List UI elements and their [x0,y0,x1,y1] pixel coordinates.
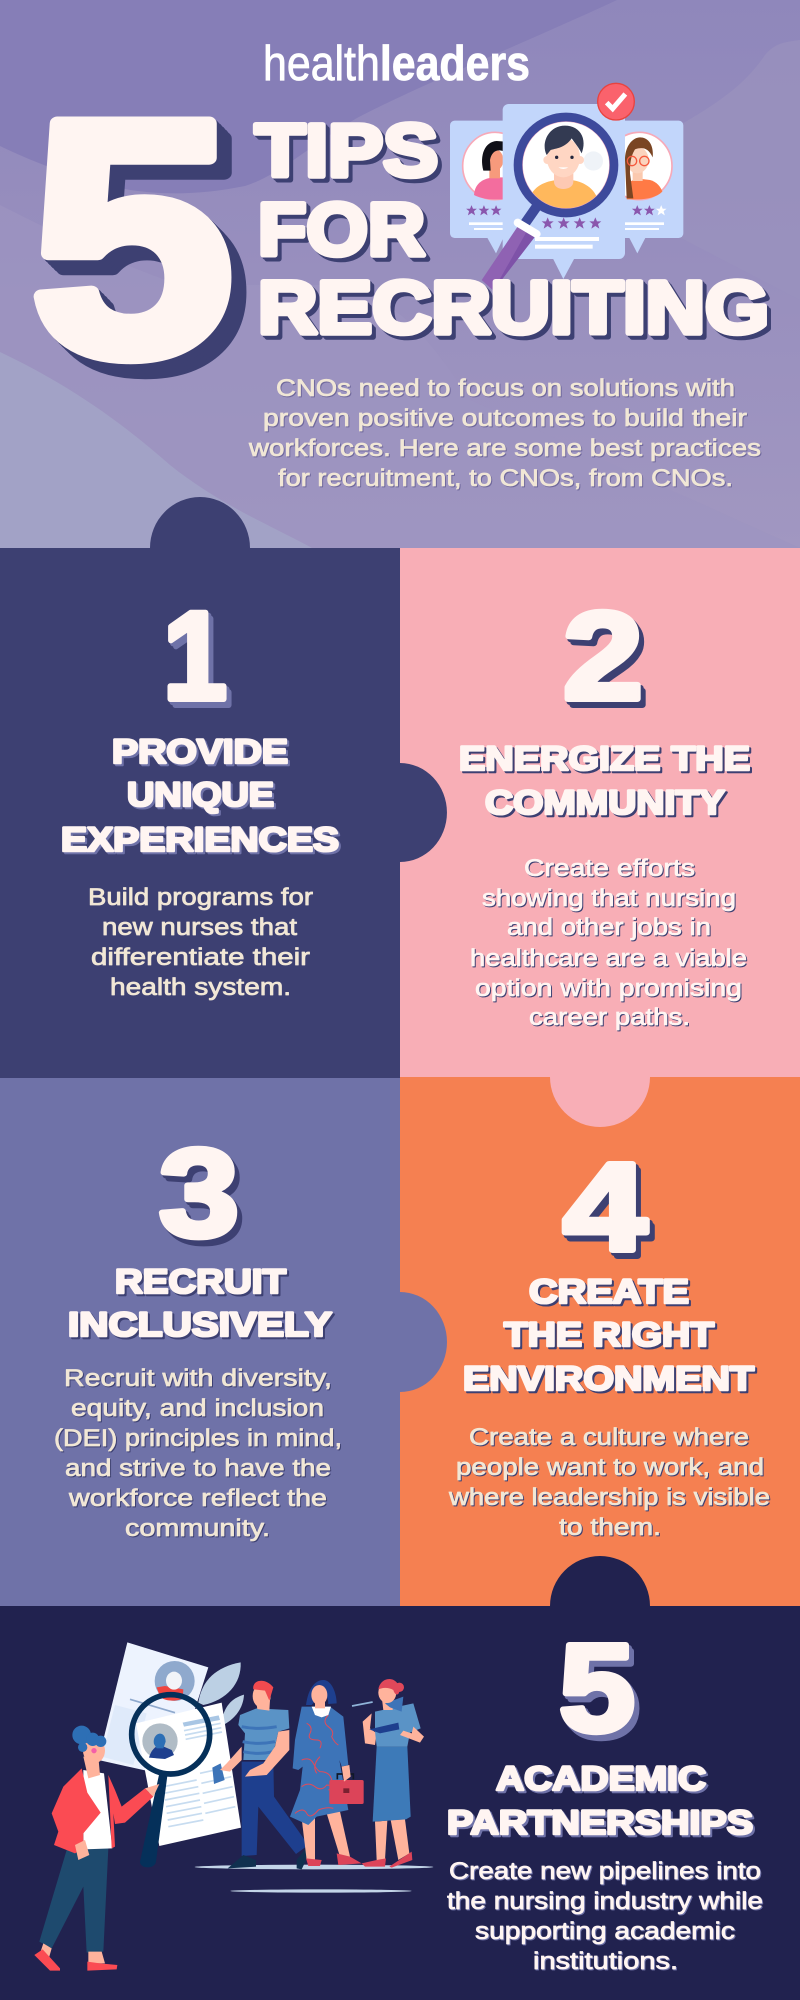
logo: healthleaders: healthleaders [263,37,530,91]
card: left candidate [450,121,527,253]
back resume [98,1642,208,1777]
heading: provide unique experiences: EXPERIENCES [61,821,339,859]
body text: where leadership is visible [448,1484,770,1511]
title: 5 tips for recruiting [255,109,769,349]
body text: Create new pipelines into [449,1858,761,1885]
body text: option with promising [475,975,742,1002]
body text [470,855,747,1031]
heading: academic partnerships: PARTNERSHIPS [447,1804,753,1842]
heading: create the right environment [463,1273,754,1398]
icon: magnifier with central portrait [482,117,614,291]
title: 5 tips for recruiting: FOR [258,188,425,271]
intro paragraph: workforces. Here are some best practices [248,435,761,462]
panel: tip 5 background [0,1556,800,2000]
floor shadows [195,1865,433,1893]
illustration: candidate profile cards under magnifier [450,83,683,291]
body text: healthcare are a viable [470,945,747,972]
tip 1 [61,587,339,1001]
body text: Recruit with diversity, [64,1365,332,1392]
heading: energize the community [459,740,750,822]
body text: equity, and inclusion [71,1395,324,1422]
body text: Create a culture where [469,1424,749,1451]
number 4: 4 [563,1138,647,1277]
intro paragraph: CNOs need to focus on solutions with [276,375,735,402]
body text [88,884,313,1001]
panel: tip 3 background [0,1078,447,1606]
front resume [136,1703,241,1846]
person: woman with red bag [290,1680,364,1866]
body text [54,1365,342,1542]
card: center candidate [503,104,625,279]
body text: (DEI) principles in mind, [54,1425,342,1452]
person: recruiter in red jacket [34,1726,159,1971]
body text: differentiate their [91,944,310,971]
body text: workforce reflect the [68,1485,327,1512]
tip 4 [448,1138,770,1541]
body text: showing that nursing [482,885,736,912]
body text: institutions. [533,1948,678,1975]
card: right candidate [607,121,683,253]
panel: header background [0,0,800,548]
tab: pink puzzle knob [550,1077,650,1127]
body text: supporting academic [475,1918,735,1945]
illustration: recruiters reviewing resumes [34,1642,433,1971]
body text: community. [125,1515,270,1542]
body text [448,1424,770,1541]
title: 5 tips for recruiting: TIPS [255,109,438,192]
panel: tip 4 background [400,1077,800,1606]
heading: create the right environment: ENVIRONMENT [463,1360,754,1398]
panel: tip 2 background [400,548,800,1078]
intro paragraph [248,375,761,492]
leaves [198,1662,244,1724]
heading: academic partnerships [447,1760,753,1842]
number 5: 5 [559,1619,635,1758]
tip 3 [54,1124,342,1542]
person: man walking [220,1681,313,1869]
title: 5 tips for recruiting: RECRUITING [258,266,769,349]
big number 5: 5 [30,51,234,425]
heading: energize the community: ENERGIZE THE [459,740,750,778]
body text: career paths. [529,1004,690,1031]
heading: create the right environment: THE RIGHT [504,1316,714,1354]
heading: provide unique experiences: PROVIDE [112,733,288,771]
person: woman with notebook [352,1679,424,1868]
body text: and strive to have the [65,1455,331,1482]
heading: academic partnerships: ACADEMIC [496,1760,706,1798]
heading: create the right environment: CREATE [529,1273,689,1311]
body text: to them. [559,1514,661,1541]
intro paragraph: proven positive outcomes to build their [263,405,747,432]
body text [447,1858,763,1975]
heading: provide unique experiences [61,733,339,859]
tip 2 [459,587,750,1031]
icon: check badge [598,83,634,120]
heading: provide unique experiences: UNIQUE [127,776,274,814]
body text: people want to work, and [456,1454,764,1481]
body text: Build programs for [88,884,313,911]
heading: recruit inclusively: RECRUIT [115,1263,286,1301]
magnifier held by recruiter [132,1695,210,1867]
body text: and other jobs in [507,914,711,941]
body text: health system. [110,974,291,1001]
heading: energize the community: COMMUNITY [485,784,725,822]
number 1: 1 [163,587,227,726]
panel: tip 1 background [0,497,447,1078]
heading: recruit inclusively [68,1263,332,1344]
number 3: 3 [159,1124,239,1263]
heading: recruit inclusively: INCLUSIVELY [68,1306,332,1344]
intro paragraph: for recruitment, to CNOs, from CNOs. [278,465,733,492]
number 2: 2 [563,587,643,726]
tip 5 [447,1619,763,1975]
body text: the nursing industry while [447,1888,763,1915]
body text: Create efforts [524,855,695,882]
body text: new nurses that [102,914,297,941]
